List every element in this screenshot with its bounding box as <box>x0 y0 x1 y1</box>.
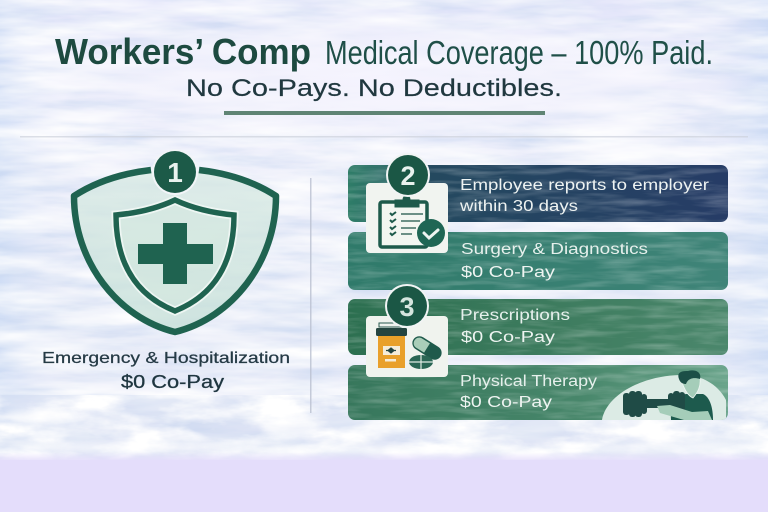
badge: number 1: 1 <box>167 157 183 188</box>
panel: prescriptions: Prescriptions <box>460 307 570 324</box>
panel: employee reports: Employee reports to employer <box>460 177 709 194</box>
icon: pill bottle <box>376 323 407 368</box>
icon: capsule and tablet <box>409 334 444 369</box>
panel: physical therapy: $0 Co-Pay <box>460 394 552 411</box>
icon: clipboard <box>380 196 445 247</box>
panel: prescriptions <box>348 299 728 355</box>
badge: number 3: 3 <box>399 292 415 322</box>
title underline <box>224 111 545 115</box>
title: Workers’ Comp <box>55 31 311 72</box>
icon card: clipboard with step 2 <box>366 153 448 253</box>
subtitle: No Co-Pays. No Deductibles. <box>186 75 562 102</box>
panel: surgery and diagnostics: Surgery & Diagnostics <box>461 241 648 258</box>
label: emergency and hospitalization: Emergency & Hospitalization <box>42 350 290 367</box>
title <box>55 31 713 72</box>
panel: physical therapy: Physical Therapy <box>460 373 597 390</box>
icon: shield with medical cross <box>74 170 276 332</box>
panel: prescriptions: $0 Co-Pay <box>461 329 555 346</box>
badge: number 2: 2 <box>400 161 416 191</box>
panel: employee reports <box>348 165 728 222</box>
panel: surgery and diagnostics <box>348 232 728 290</box>
badge: number 1 <box>152 149 198 195</box>
icon: person lifting dumbbell <box>602 370 726 420</box>
panel: surgery and diagnostics: $0 Co-Pay <box>461 264 555 281</box>
icon: cross <box>138 223 213 284</box>
label: emergency and hospitalization: $0 Co-Pay <box>121 372 224 392</box>
panel: emergency and hospitalization <box>42 149 290 392</box>
vertical divider <box>310 178 312 413</box>
panel: employee reports: within 30 days <box>459 198 578 215</box>
panel: physical therapy <box>348 365 728 420</box>
icon card: medication with step 3 <box>366 284 448 377</box>
label: emergency and hospitalization <box>42 350 290 392</box>
